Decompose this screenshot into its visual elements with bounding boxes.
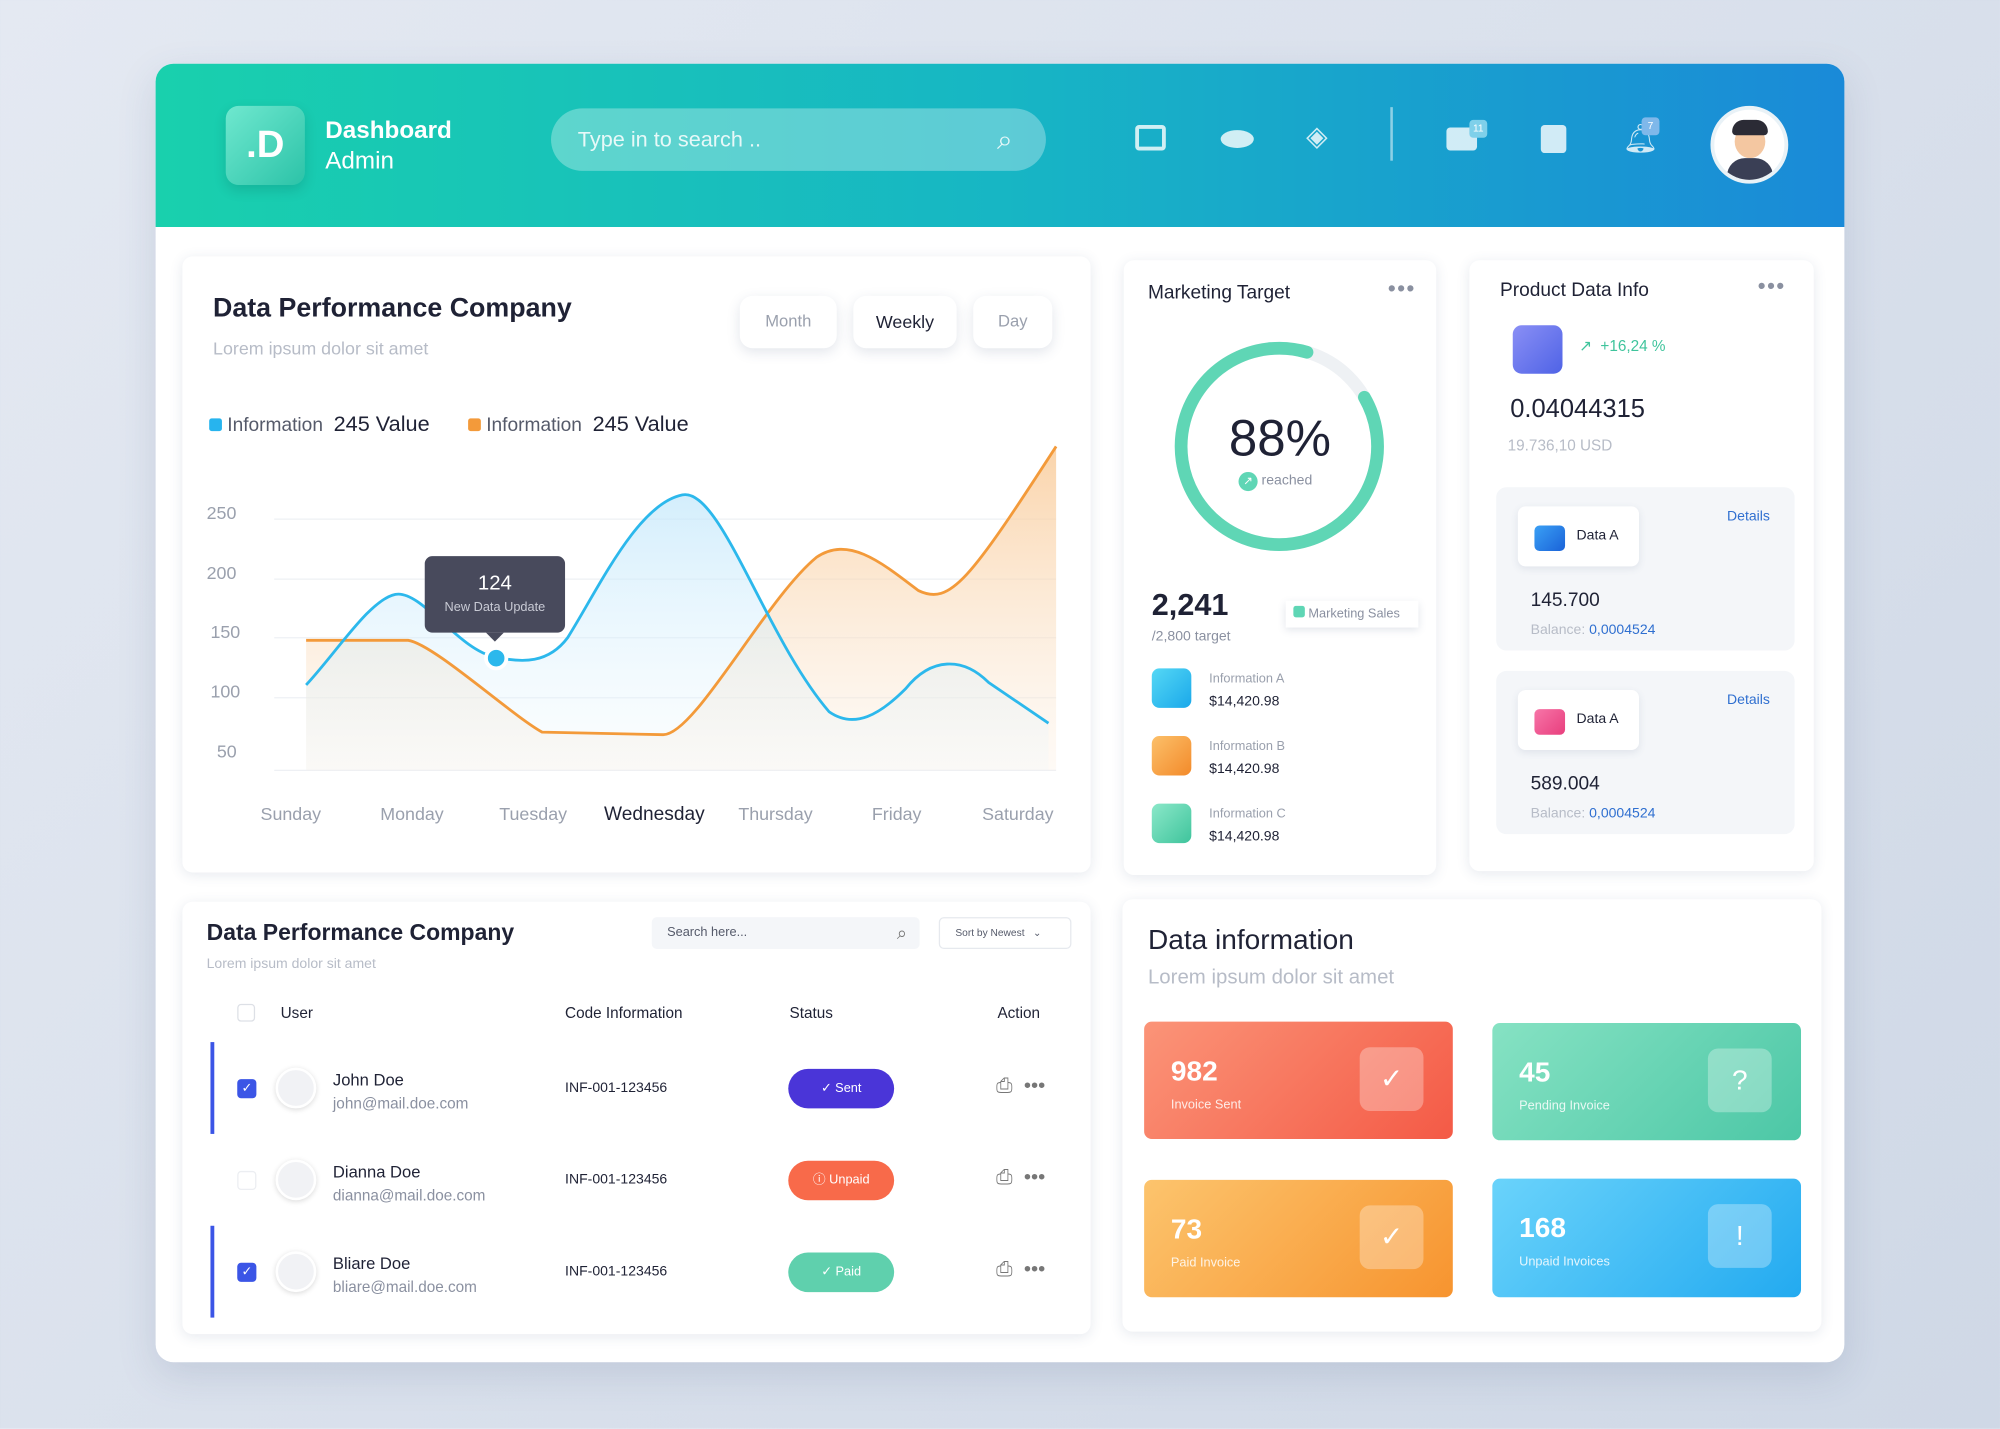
area chart: Sunday	[261, 804, 321, 824]
legend: Information 245 Value Information 245 Value	[227, 412, 689, 436]
info list: Information C	[1209, 807, 1286, 821]
panel: product data info: 19.736,10 USD	[1508, 436, 1612, 454]
sort dropdown	[939, 917, 1071, 949]
card: paid invoice	[1144, 1180, 1453, 1297]
heading: Data Performance Company	[207, 920, 514, 945]
panel: marketing target	[1124, 260, 1436, 875]
area chart: 250	[207, 503, 236, 523]
logo	[226, 106, 305, 185]
brand text	[325, 117, 452, 175]
search: ⌕	[997, 124, 1013, 156]
total: 2,241	[1152, 588, 1228, 622]
panel: user table: Lorem ipsum dolor sit amet	[207, 957, 376, 972]
panel: user table	[182, 902, 1091, 1334]
area chart: Friday	[872, 804, 922, 824]
brand text: Dashboard	[325, 117, 452, 144]
header icons: 7	[1648, 120, 1653, 131]
info list	[1152, 668, 1286, 844]
sub card B: Balance: 0,0004524	[1531, 806, 1655, 821]
avatar	[1710, 106, 1788, 184]
header icons	[1135, 107, 1660, 161]
value: 0.04044315	[1510, 395, 1645, 423]
heading: Data Performance Company	[213, 293, 572, 323]
period buttons: Day	[998, 311, 1028, 330]
row: John Doe: john@mail.doe.com	[333, 1094, 468, 1112]
row: Bliare Doe	[210, 1226, 1045, 1318]
area chart: 200	[207, 563, 236, 583]
row: Dianna Doe: ⎙ •••	[996, 1167, 1045, 1189]
header icons: 11	[1473, 122, 1484, 134]
logo: .D	[246, 124, 284, 166]
info list: $14,420.98	[1209, 694, 1279, 709]
card: unpaid invoices: Unpaid Invoices	[1519, 1255, 1610, 1269]
header icons: 🔔︎	[1622, 122, 1658, 154]
sort dropdown: Sort by Newest ⌄	[955, 927, 1042, 939]
product icon	[1513, 325, 1562, 374]
sub card A: Balance: 0,0004524	[1531, 622, 1655, 638]
period buttons: Weekly	[876, 311, 934, 332]
row: John Doe: ✓	[241, 1082, 252, 1096]
search: Type in to search ..	[578, 128, 761, 152]
sub card B: 589.004	[1531, 773, 1600, 795]
sub card A: 145.700	[1531, 589, 1600, 611]
row: Dianna Doe: Dianna Doe	[333, 1162, 420, 1181]
tooltip	[425, 556, 565, 633]
period buttons: Month	[765, 311, 811, 330]
area chart: Thursday	[738, 804, 813, 824]
row: Dianna Doe: ⓘ Unpaid	[813, 1173, 870, 1187]
legend chip: Marketing Sales	[1308, 607, 1400, 621]
table header	[237, 1004, 1040, 1022]
row: John Doe: ✓ Sent	[821, 1082, 861, 1096]
card: unpaid invoices	[1492, 1179, 1801, 1297]
sub card B: Data A	[1577, 712, 1619, 727]
table header: User	[281, 1004, 313, 1022]
row: Bliare Doe: bliare@mail.doe.com	[333, 1278, 477, 1296]
panel: marketing target: /2,800 target	[1152, 629, 1231, 644]
card: paid invoice: ✓	[1380, 1221, 1403, 1253]
card: paid invoice: 73	[1171, 1213, 1202, 1245]
panel: product data info	[1469, 260, 1814, 871]
row: John Doe: John Doe	[333, 1070, 404, 1089]
sub card B	[1496, 671, 1795, 834]
tooltip: New Data Update	[445, 601, 545, 615]
header icons: ◈	[1306, 120, 1328, 152]
panel: data performance chart	[182, 256, 1091, 872]
card: pending invoice: Pending Invoice	[1519, 1099, 1610, 1114]
sub card A	[1496, 487, 1795, 651]
heading: Data information	[1148, 923, 1354, 955]
row: Bliare Doe: Bliare Doe	[333, 1254, 410, 1273]
row: Bliare Doe: INF-001-123456	[565, 1264, 667, 1279]
area chart: 100	[210, 682, 240, 702]
ring chart	[1174, 342, 1384, 551]
panel: marketing target: ↗	[1243, 474, 1253, 487]
search	[551, 108, 1046, 171]
row: Dianna Doe	[237, 1159, 1045, 1204]
card: invoice sent: 982	[1171, 1055, 1218, 1087]
brand text: Admin	[325, 148, 394, 175]
info list: Information A	[1209, 672, 1284, 686]
row: Dianna Doe: dianna@mail.doe.com	[333, 1186, 485, 1204]
row: John Doe: ⎙ •••	[996, 1075, 1045, 1097]
table search: ⌕	[897, 922, 907, 943]
panel: marketing target: reached	[1262, 473, 1312, 489]
row: John Doe	[210, 1042, 1045, 1134]
sub card B: Details	[1727, 693, 1770, 708]
main card	[156, 64, 1844, 1362]
table header: Status	[790, 1004, 833, 1022]
card: unpaid invoices: !	[1736, 1219, 1744, 1251]
area chart: Tuesday	[499, 804, 567, 824]
info list: Information B	[1209, 740, 1285, 754]
area chart: Monday	[380, 804, 444, 824]
card: pending invoice: ?	[1732, 1064, 1748, 1096]
info list: $14,420.98	[1209, 829, 1279, 844]
card: pending invoice: 45	[1519, 1056, 1550, 1088]
row: Bliare Doe: ⎙ •••	[996, 1259, 1045, 1281]
area chart: Wednesday	[604, 804, 705, 825]
panel: data information: Lorem ipsum dolor sit amet	[1148, 967, 1394, 989]
sub card A: Data A	[1577, 528, 1619, 543]
row: Bliare Doe: ✓ Paid	[821, 1265, 861, 1279]
table search: Search here...	[667, 926, 747, 940]
table header: Code Information	[565, 1004, 682, 1022]
legend chip	[1286, 601, 1418, 628]
row: Bliare Doe: ✓	[241, 1265, 252, 1279]
heading: Marketing Target	[1148, 282, 1290, 304]
period buttons	[736, 304, 1056, 356]
percentage: 88%	[1229, 411, 1331, 467]
area chart: Saturday	[982, 804, 1054, 824]
info list: $14,420.98	[1209, 761, 1279, 777]
panel: data information	[1122, 899, 1821, 1332]
card: invoice sent	[1144, 1022, 1453, 1139]
heading: Product Data Info	[1500, 279, 1649, 301]
card: pending invoice	[1492, 1023, 1801, 1140]
table search	[652, 917, 920, 949]
tooltip: 124	[478, 573, 512, 594]
subtitle: Lorem ipsum dolor sit amet	[213, 338, 428, 358]
growth: ↗ +16,24 %	[1579, 337, 1666, 355]
row: Dianna Doe: INF-001-123456	[565, 1172, 667, 1187]
card: paid invoice: Paid Invoice	[1171, 1256, 1240, 1270]
area chart: 50	[217, 742, 237, 762]
sub card A: Details	[1727, 509, 1770, 524]
panel: marketing target: •••	[1388, 276, 1416, 301]
card: invoice sent: Invoice Sent	[1171, 1098, 1241, 1112]
area chart	[207, 446, 1058, 825]
card: unpaid invoices: 168	[1519, 1212, 1566, 1244]
header bar	[156, 64, 1844, 227]
card: invoice sent: ✓	[1380, 1062, 1403, 1094]
table header: Action	[997, 1004, 1040, 1022]
area chart: 150	[210, 622, 240, 642]
row: John Doe: INF-001-123456	[565, 1080, 667, 1096]
panel: product data info: •••	[1758, 273, 1786, 298]
